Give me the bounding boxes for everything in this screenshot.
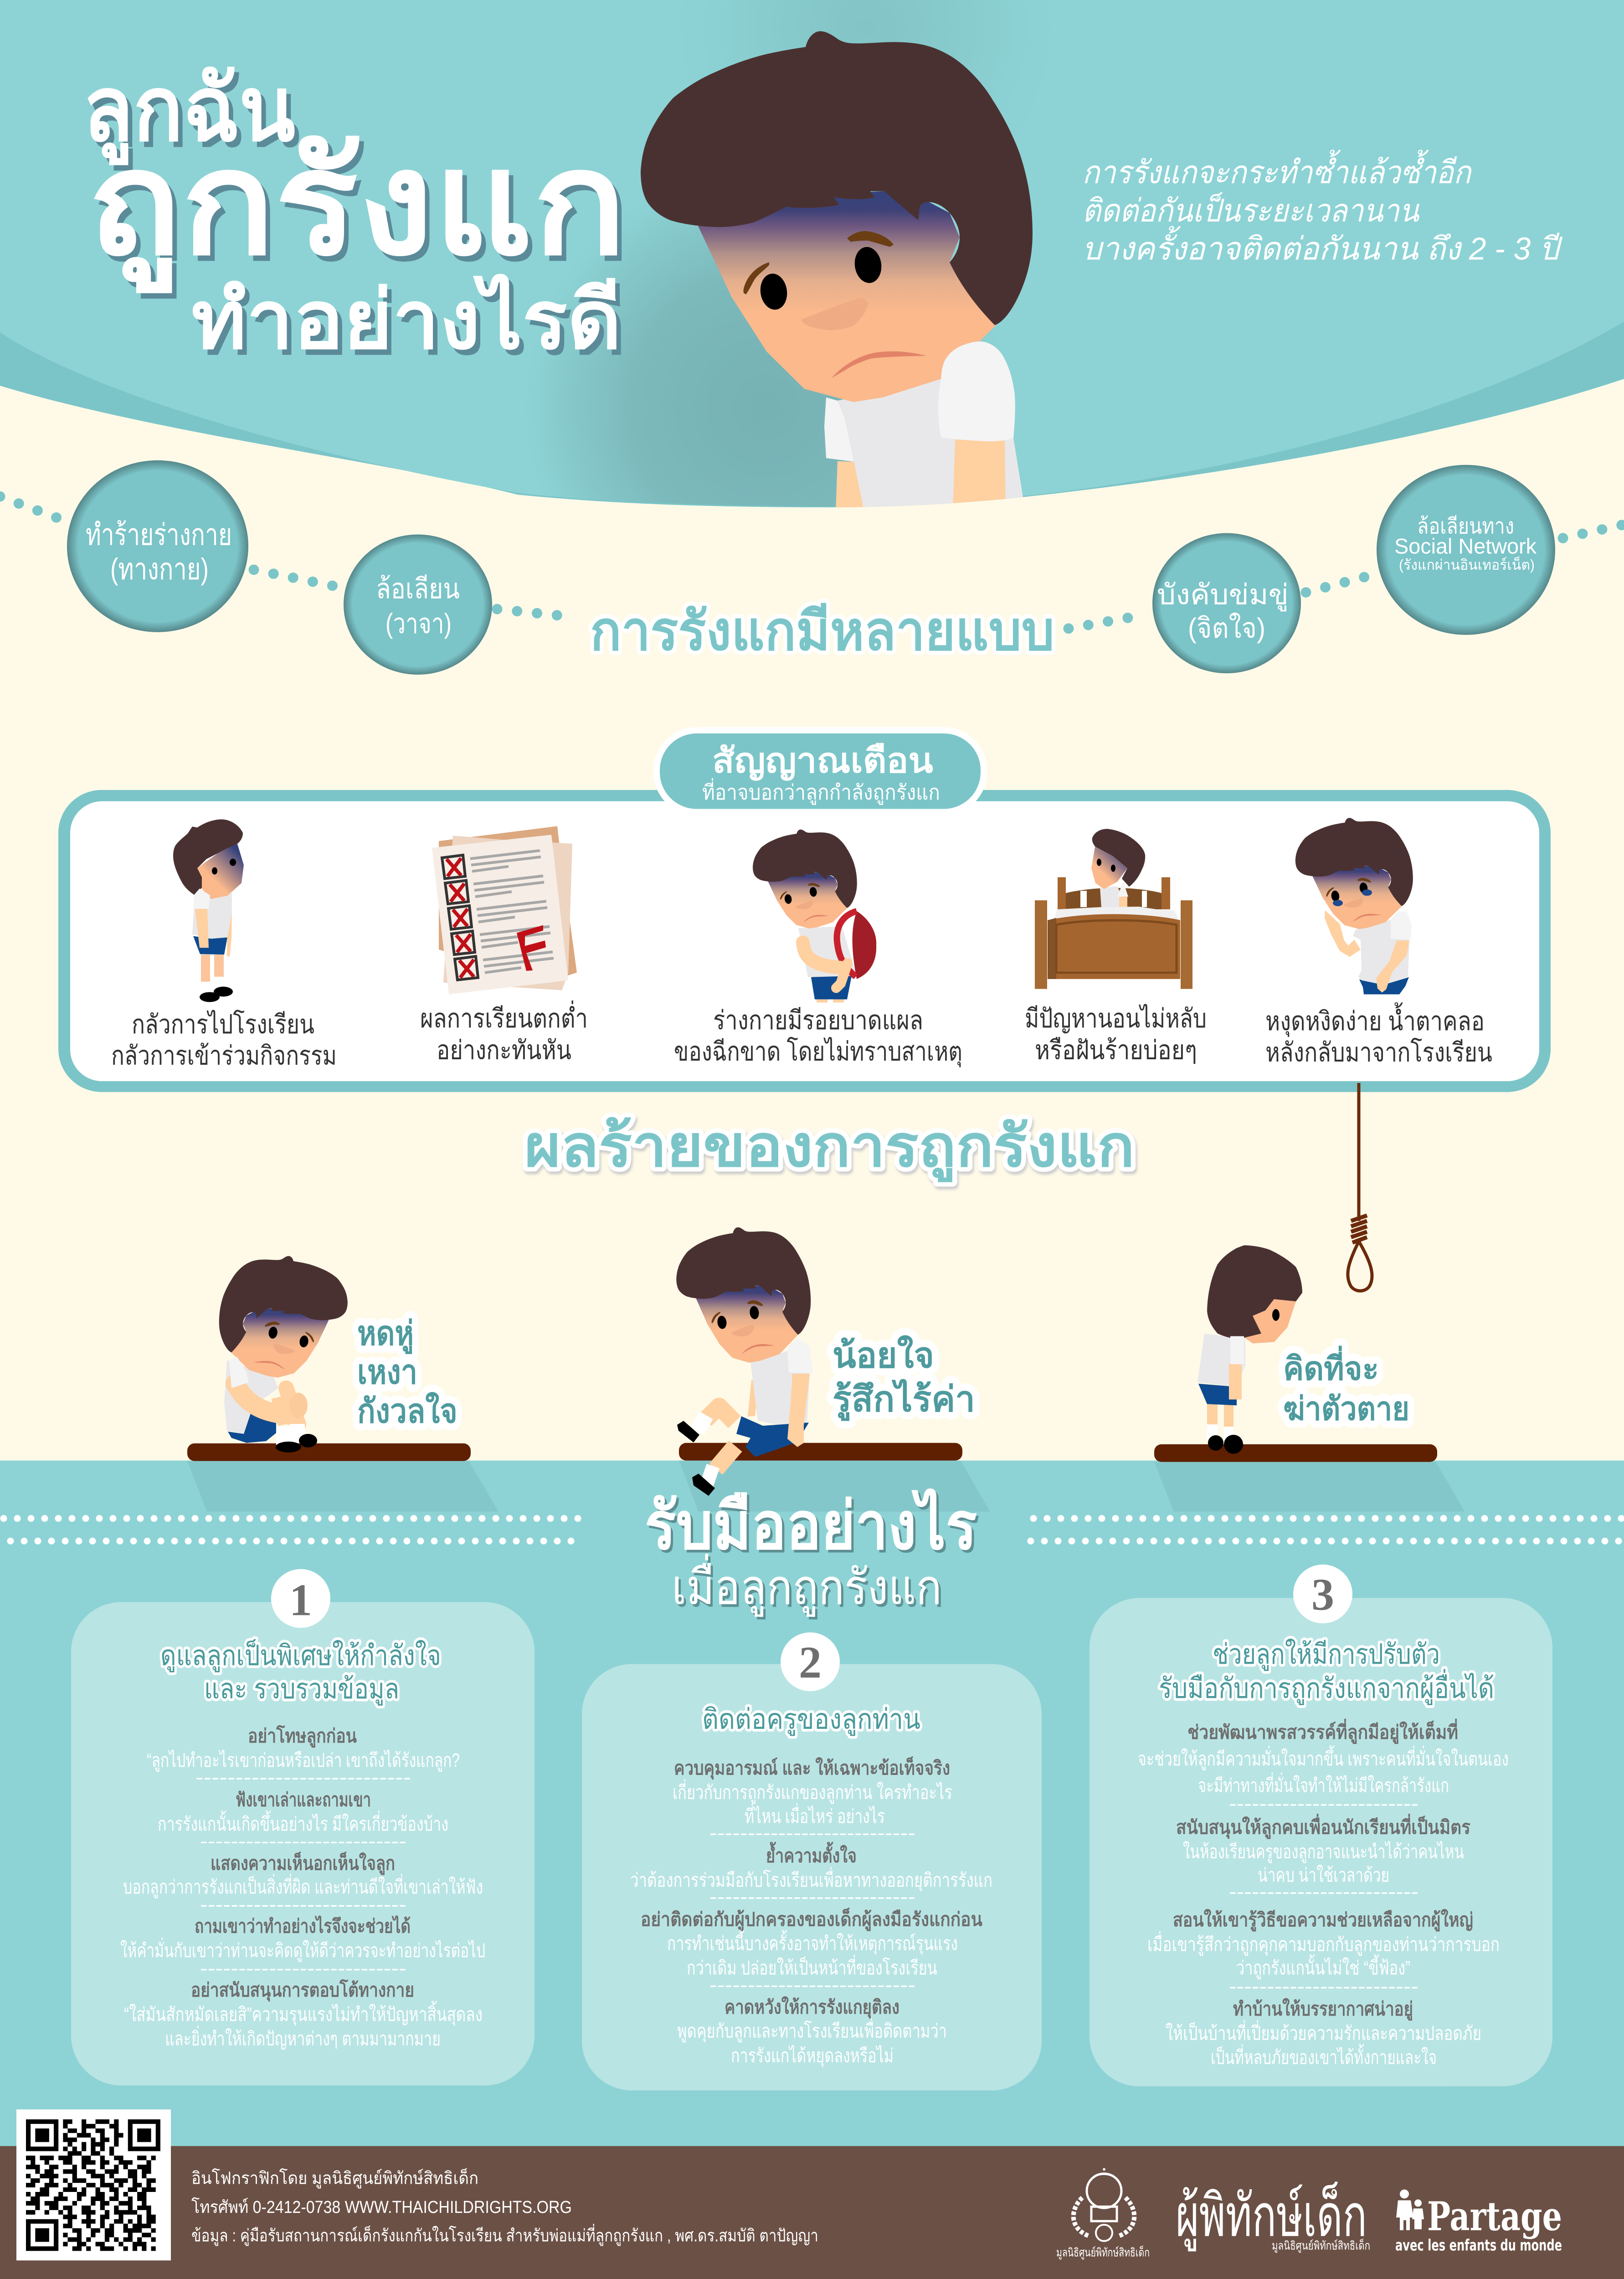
footer credit text	[191, 2168, 818, 2246]
step 2 body: ---------------------------	[709, 1886, 915, 1908]
step 3 body: สอนให้เขารู้วิธีขอความช่วยเหลือจากผู้ใหญ่	[1173, 1908, 1473, 1932]
step 2 body: ---------------------------	[709, 1974, 915, 1995]
circle: mental	[1152, 533, 1301, 673]
step 3 body: เป็นที่หลบภัยของเขาได้ทั้งกายและใจ	[1211, 2043, 1437, 2068]
pill: warning signs heading: ที่อาจบอกว่าลูกกำลังถูกรังแก	[702, 778, 940, 805]
logo: child protector: มูลนิธิศูนย์พิทักษ์สิทธิเด็ก	[1272, 2238, 1370, 2253]
logo: child protector	[1176, 2181, 1370, 2253]
step 2 body: การทำเช่นนี้บางครั้งอาจทำให้เหตุการณ์รุนแรง	[667, 1929, 958, 1955]
footer credit text: โทรศัพท์ 0-2412-0738 WWW.THAICHILDRIGHTS.ORG	[191, 2197, 572, 2217]
header band light with shading	[0, 0, 1624, 506]
logo: Partage	[1395, 2190, 1562, 2254]
step 3 body: ทำบ้านให้บรรยากาศน่าอยู่	[1233, 1998, 1413, 2021]
title: ทำอย่างไรดี	[191, 274, 622, 366]
arms	[836, 439, 1006, 511]
icon: boy standing afraid	[173, 820, 244, 1002]
effect labels: depressed	[357, 1315, 457, 1430]
shirt body	[838, 379, 1025, 511]
circle: mental: (จิตใจ)	[1188, 612, 1265, 644]
step 1 body: “ใส่มันสักหมัดเลยสิ”ความรุนแรงไม่ทำให้ปัญหาสิ้นสุดลง	[124, 2001, 483, 2026]
circle: verbal: (วาจา)	[385, 608, 452, 639]
panel: warning signs	[58, 730, 1551, 1092]
step 3 heading: ช่วยลูกให้มีการปรับตัว	[1213, 1638, 1440, 1671]
title: ลูกฉัน	[83, 59, 295, 165]
icon: failed test paper	[432, 826, 577, 995]
step 1 heading: ดูแลลูกเป็นพิเศษให้กำลังใจ	[160, 1639, 441, 1672]
circle: physical	[67, 460, 248, 632]
number 3	[1293, 1565, 1352, 1624]
number 1	[271, 1569, 330, 1628]
shirt back sleeve	[824, 397, 854, 462]
step 3 body	[1138, 1719, 1509, 2068]
warning captions: ร่างกายมีรอยบาดแผล	[713, 1006, 923, 1035]
warning captions: ผลการเรียนตกต่ำ	[420, 1000, 588, 1033]
QR code	[16, 2109, 171, 2260]
effect labels: discouraged: รู้สึกไร้ค่า	[833, 1379, 975, 1421]
panel: step 1	[71, 1569, 534, 2085]
title	[83, 59, 627, 366]
step 3 body: -------------------------	[1229, 1975, 1418, 1997]
step 2 body: ย้ำความตั้งใจ	[766, 1841, 857, 1866]
circle: mental: บังคับข่มขู่	[1157, 579, 1289, 611]
warning captions: หลังกลับมาจากโรงเรียน	[1265, 1037, 1492, 1067]
heading: how to cope	[645, 1488, 977, 1617]
bottom teal section	[0, 1460, 1624, 2148]
boy standing beside noose	[1154, 1245, 1437, 1462]
heading: effects: ผลร้ายของการถูกรังแก	[524, 1114, 1135, 1182]
warning captions: อย่างกะทันหัน	[437, 1036, 571, 1065]
intro text	[1082, 150, 1562, 266]
step 1 body: และยิ่งทำให้เกิดปัญหาต่างๆ ตามมามากมาย	[165, 2026, 441, 2050]
step 2 heading: ติดต่อครูของลูกท่าน	[702, 1704, 920, 1736]
warning captions: หงุดหงิดง่าย น้ำตาคลอ	[1265, 1002, 1485, 1037]
logo: child protector: ผู้พิทักษ์เด็ก	[1176, 2181, 1367, 2252]
circle: social network: (รังแกผ่านอินเทอร์เน็ต)	[1399, 556, 1535, 573]
step 2 body: คาดหวังให้การรังแกยุติลง	[725, 1996, 899, 2019]
effect labels: suicidal: คิดที่จะ	[1283, 1346, 1379, 1387]
step 2 body: ---------------------------	[709, 1822, 915, 1844]
boy sitting sad on log	[676, 1227, 962, 1496]
head	[641, 31, 1033, 402]
number 2	[781, 1632, 840, 1691]
step 3 heading	[1159, 1638, 1494, 1705]
circle: verbal: ล้อเลียน	[376, 573, 460, 604]
effect labels: discouraged: น้อยใจ	[833, 1335, 934, 1375]
footer band	[0, 2146, 1624, 2279]
step 3 body: จะมีท่าทางที่มั่นใจทำให้ไม่มีใครกล้ารังแก	[1198, 1773, 1449, 1796]
intro text: ติดต่อกันเป็นระยะเวลานาน	[1082, 192, 1420, 228]
step 3 body: -------------------------	[1229, 1793, 1418, 1814]
step 1 body: ---------------------------	[200, 1957, 406, 1979]
step 3 body: ว่าถูกรังแกนั้นไม่ใช่ “ขี้ฟ้อง”	[1236, 1954, 1410, 1979]
step 1 body: ฟังเขาเล่าและถามเขา	[236, 1789, 371, 1810]
step 1 heading: และ รวบรวมข้อมูล	[204, 1673, 399, 1706]
warning captions: กลัวการเข้าร่วมกิจกรรม	[111, 1042, 337, 1070]
logo: Partage: avec les enfants du monde	[1395, 2237, 1562, 2254]
logo: foundation crest: มูลนิธิศูนย์พิทักษ์สิทธิเด็ก	[1056, 2245, 1150, 2259]
sleeve	[938, 341, 1015, 441]
footer credit text: อินโฟกราฟิกโดย มูลนิธิศูนย์พิทักษ์สิทธิเด็ก	[191, 2168, 478, 2189]
step 3 body: สนับสนุนให้ลูกคบเพื่อนนักเรียนที่เป็นมิตร	[1176, 1814, 1470, 1839]
heading: how to cope: เมื่อลูกถูกรังแก	[672, 1553, 942, 1617]
step 1 body: ---------------------------	[195, 1767, 411, 1788]
pill: warning signs heading	[657, 730, 984, 812]
step 3 body: น่าคบ น่าใช้เวลาด้วย	[1258, 1864, 1389, 1886]
footer credit text: ข้อมูล : คู่มือรับสถานการณ์เด็กรังแกกันในโรงเรียน สำหรับพ่อแม่ที่ลูกถูกรังแก , พศ.ดร.สมบัติ ตาปัญญา	[191, 2224, 818, 2246]
step 1 body	[120, 1725, 485, 2050]
intro text: บางครั้งอาจติดต่อกันนาน ถึง 2 - 3 ปี	[1082, 226, 1562, 266]
warning captions: หรือฝันร้ายบ่อยๆ	[1035, 1036, 1197, 1065]
log shadows	[187, 1460, 1465, 1511]
step 1 body: บอกลูกว่าการรังแกเป็นสิ่งที่ผิด และท่านดีใจที่เขาเล่าให้ฟัง	[123, 1874, 483, 1898]
step 1 body: ให้คำมั่นกับเขาว่าท่านจะคิดดูให้ดีว่าควรจะทำอย่างไรต่อไป	[120, 1938, 485, 1962]
step 1 body: อย่าสนับสนุนการตอบโต้ทางกาย	[191, 1979, 414, 2002]
effect labels: suicidal	[1283, 1346, 1409, 1427]
step 3 body: เมื่อเขารู้สึกว่าถูกคุกคามบอกกับลูกของท่านว่าการบอก	[1147, 1931, 1500, 1956]
title: ถูกรังแก	[88, 122, 627, 294]
step 2 body: ที่ไหน เมื่อไหร่ อย่างไร	[745, 1803, 885, 1827]
step 3 body: จะช่วยให้ลูกมีความมั่นใจมากขึ้น เพราะคนที่มั่นใจในตนเอง	[1138, 1745, 1509, 1770]
step 3 body: ให้เป็นบ้านที่เปี่ยมด้วยความรักและความปลอดภัย	[1166, 2020, 1481, 2044]
step 2 body: ควบคุมอารมณ์ และ ให้เฉพาะข้อเท็จจริง	[674, 1756, 950, 1780]
illustration: big boy	[641, 31, 1033, 511]
warning captions: ของฉีกขาด โดยไม่ทราบสาเหตุ	[674, 1036, 962, 1067]
circle: social network: Social Network	[1394, 534, 1537, 558]
step 2 body: เกี่ยวกับการถูกรังแกของลูกท่าน ใครทำอะไร	[673, 1779, 952, 1804]
circle: social network	[1377, 465, 1555, 635]
step 1 body: ---------------------------	[200, 1894, 406, 1915]
circle: physical: ทำร้ายร่างกาย	[86, 518, 232, 551]
step 2 body: การรังแกได้หยุดลงหรือไม่	[731, 2045, 894, 2067]
circle: social network: ล้อเลียนทาง	[1417, 515, 1514, 539]
effect labels: discouraged	[833, 1335, 975, 1421]
white dotted rows	[4, 1518, 1624, 1541]
circle: verbal	[344, 535, 492, 675]
heading: how to cope: รับมืออย่างไร	[645, 1488, 977, 1563]
rope and noose	[1348, 1083, 1372, 1291]
step 1 heading	[160, 1639, 441, 1706]
step 2 body: กว่าเดิม ปล่อยให้เป็นหน้าที่ของโรงเรียน	[687, 1955, 937, 1978]
effect labels: depressed: กังวลใจ	[357, 1392, 457, 1430]
panel: step 2	[582, 1632, 1042, 2090]
number 1: 1	[289, 1575, 312, 1625]
panel: step 3	[1090, 1565, 1552, 2086]
boy sitting hugging knees	[187, 1256, 471, 1461]
number 3: 3	[1311, 1569, 1334, 1620]
step 3 heading: รับมือกับการถูกรังแกจากผู้อื่นได้	[1159, 1669, 1494, 1705]
step 2 body	[630, 1756, 992, 2067]
logo: Partage: Partage	[1427, 2193, 1562, 2240]
intro text: การรังแกจะกระทำซ้ำแล้วซ้ำอีก	[1082, 150, 1472, 190]
heading: types of bullying: การรังแกมีหลายแบบ	[590, 601, 1054, 661]
step 2 body: อย่าติดต่อกับผู้ปกครองของเด็กผู้ลงมือรังแกก่อน	[641, 1908, 982, 1931]
number 2: 2	[799, 1637, 822, 1687]
warning captions	[111, 1000, 1492, 1070]
check rows	[442, 851, 541, 879]
effect labels: depressed: หดหู่	[357, 1315, 414, 1354]
step 2 body: ว่าต้องการร่วมมือกับโรงเรียนเพื่อหาทางออกยุติการรังแก	[630, 1867, 992, 1892]
icon: injured boy with backpack	[753, 830, 876, 1002]
step 1 body: การรังแกนั้นเกิดขึ้นอย่างไร มีใครเกี่ยวข้องบ้าง	[158, 1810, 448, 1835]
header band dark	[0, 0, 1624, 507]
step 1 body: “ลูกไปทำอะไรเขาก่อนหรือเปล่า เขาถึงได้รังแกลูก?	[147, 1749, 460, 1772]
step 1 body: ---------------------------	[200, 1830, 406, 1852]
icon: boy in bed	[1035, 829, 1192, 989]
pill: warning signs heading: สัญญาณเตือน	[712, 742, 933, 781]
step 3 body: ช่วยพัฒนาพรสวรรค์ที่ลูกมีอยู่ให้เต็มที่	[1187, 1719, 1458, 1744]
step 3 body: ในห้องเรียนครูของลูกอาจแนะนำได้ว่าคนไหน	[1183, 1841, 1464, 1863]
logo: foundation crest	[1056, 2168, 1150, 2259]
dotted connectors	[0, 496, 1624, 629]
warning captions: กลัวการไปโรงเรียน	[132, 1009, 314, 1039]
circle: physical: (ทางกาย)	[110, 552, 209, 586]
effect labels: depressed: เหงา	[357, 1353, 417, 1391]
step 1 body: ถามเขาว่าทำอย่างไรจึงจะช่วยได้	[195, 1915, 411, 1937]
step 1 body: อย่าโทษลูกก่อน	[248, 1725, 357, 1748]
step 2 body: พูดคุยกับลูกและทางโรงเรียนเพื่อติดตามว่า	[677, 2018, 947, 2042]
icon: crying boy	[1295, 818, 1413, 995]
warning captions: มีปัญหานอนไม่หลับ	[1025, 1003, 1207, 1033]
step 3 body: -------------------------	[1229, 1881, 1418, 1903]
effect labels: suicidal: ฆ่าตัวตาย	[1283, 1391, 1409, 1427]
step 1 body: แสดงความเห็นอกเห็นใจลูก	[211, 1851, 395, 1875]
